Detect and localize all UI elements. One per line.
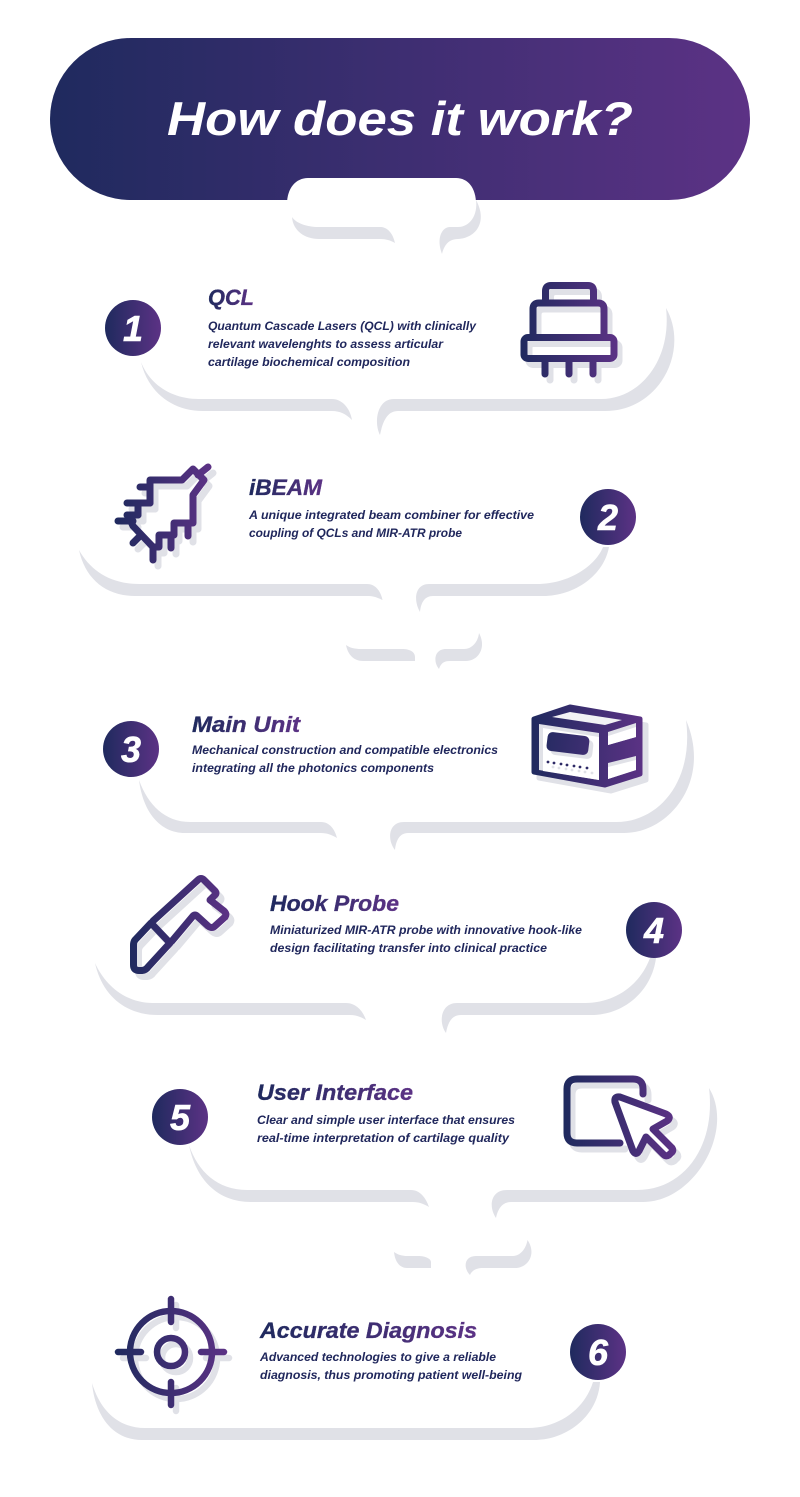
icon: window and cursor (567, 1079, 678, 1162)
number badge 3: 3 (121, 729, 141, 770)
banner notch (287, 178, 476, 204)
heading QCL: QCL (208, 285, 254, 310)
number badge 2 (580, 489, 636, 545)
banner connector shadow (292, 200, 481, 254)
number badge 6 (570, 1324, 626, 1380)
title: How does it work? (167, 92, 633, 145)
description QCL: Quantum Cascade Lasers (QCL) with clinically (208, 321, 477, 333)
bubble shadow 1 (141, 308, 674, 435)
panel: step 5 User Interface (152, 1079, 717, 1218)
description Hook Probe: design facilitating transfer into clinical practice (270, 943, 548, 955)
heading iBEAM: iBEAM (249, 475, 323, 500)
number badge 1: 1 (123, 308, 143, 349)
bubble shadow 2 (79, 547, 609, 612)
heading Main Unit: Main Unit (192, 712, 302, 737)
bubble shadow 3 (139, 720, 694, 850)
icon: laser module (524, 286, 619, 380)
number badge 4 (626, 902, 682, 958)
number badge 4: 4 (643, 910, 664, 951)
number badge 1 (105, 300, 161, 356)
icon: hook probe (134, 878, 231, 976)
panel: step 3 Main Unit (103, 707, 694, 850)
icon: target crosshair (118, 1299, 229, 1411)
panel: step 1 QCL (105, 285, 674, 435)
description iBEAM: A unique integrated beam combiner for effective (248, 510, 535, 522)
description QCL (208, 321, 477, 369)
number badge 3 (103, 721, 159, 777)
heading Hook Probe: Hook Probe (270, 891, 399, 916)
number badge 5: 5 (170, 1097, 191, 1138)
bubble shadow 6 (92, 1382, 600, 1440)
header banner (50, 38, 750, 200)
icon: main unit box (534, 707, 646, 791)
description Accurate Diagnosis: diagnosis, thus promoting patient well-being (260, 1370, 522, 1382)
description Accurate Diagnosis: Advanced technologies to give a reliable (259, 1352, 497, 1364)
description User Interface: real-time interpretation of cartilage quality (257, 1133, 510, 1145)
description Hook Probe (270, 925, 583, 955)
bubble shadow 4 (95, 958, 656, 1033)
description Hook Probe: Miniaturized MIR-ATR probe with innovative hook-like (270, 925, 583, 937)
description iBEAM: coupling of QCLs and MIR-ATR probe (249, 528, 463, 540)
panel: step 6 Accurate Diagnosis (92, 1299, 626, 1440)
description Main Unit (192, 745, 498, 775)
description iBEAM (248, 510, 535, 540)
heading Accurate Diagnosis: Accurate Diagnosis (259, 1318, 477, 1343)
description QCL: cartilage biochemical composition (208, 357, 410, 369)
middle connector shadow B (394, 1240, 531, 1275)
heading User Interface: User Interface (257, 1080, 413, 1105)
bubble shadow 5 (189, 1088, 717, 1218)
number badge 5 (152, 1089, 208, 1145)
icon: beam combiner (118, 467, 213, 566)
description Accurate Diagnosis (259, 1352, 522, 1382)
description QCL: relevant wavelenghts to assess articular (208, 339, 444, 351)
number badge 2: 2 (597, 497, 618, 538)
number badge 6: 6 (588, 1332, 609, 1373)
description User Interface (257, 1115, 515, 1145)
panel: step 4 Hook Probe (95, 878, 682, 1033)
description User Interface: Clear and simple user interface that ensures (257, 1115, 515, 1127)
middle connector shadow A (346, 633, 482, 669)
panel: step 2 iBEAM (79, 467, 636, 612)
description Main Unit: integrating all the photonics components (192, 763, 434, 775)
description Main Unit: Mechanical construction and compatible electronics (192, 745, 498, 757)
